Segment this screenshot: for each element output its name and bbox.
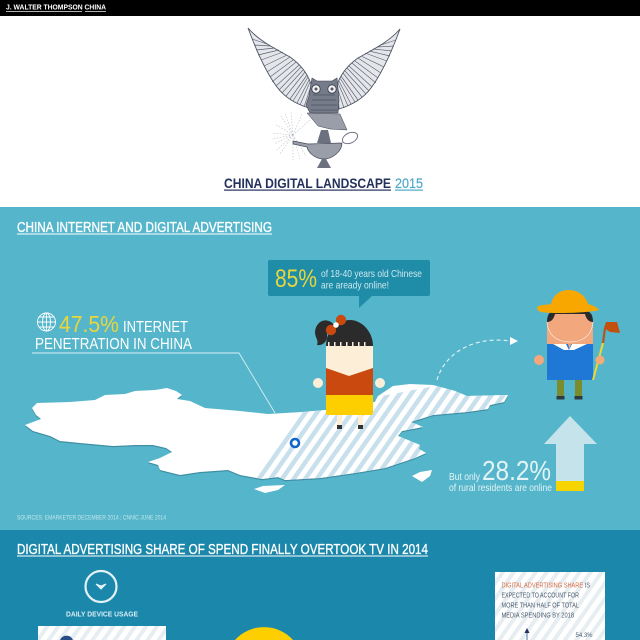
rural stat: 28.2% (482, 455, 551, 486)
panel: digital advertising share (0, 530, 640, 640)
card: digital share forecast: EXPECTED TO ACCOUNT FOR (502, 590, 579, 600)
top bar (0, 0, 640, 16)
card: digital share forecast: 54.3% (576, 632, 593, 639)
card: digital share forecast: MEDIA SPENDING BY 2018 (502, 610, 574, 619)
map of China (25, 384, 508, 493)
heading: digital advertising share of spend: DIGITAL ADVERTISING SHARE OF SPEND FINALLY OVERTOOK TV IN 2014 (17, 542, 428, 558)
callout: 85 percent: of 18-40 years old Chinese (321, 268, 422, 280)
sources: SOURCES: EMARKETER DECEMBER 2014 ; CNNIC JUNE 2014 (17, 514, 166, 522)
icon: clock (86, 571, 116, 602)
illustration: owl with lamp (248, 28, 400, 168)
island: Taiwan (412, 470, 432, 482)
penetration stat: PENETRATION IN CHINA (35, 336, 192, 353)
icon: farmer character (534, 290, 620, 400)
panel: China internet (0, 207, 640, 530)
lamp (341, 130, 359, 146)
island: Hainan (254, 485, 285, 493)
up arrow (544, 416, 597, 491)
map location marker (291, 439, 299, 447)
icon: globe (38, 313, 56, 331)
callout: 85 percent: are aready online! (321, 280, 389, 292)
device usage card (38, 626, 166, 640)
icon: girl character (313, 315, 385, 429)
leader line (32, 353, 275, 413)
rural stat: But only (449, 471, 481, 483)
title: CHINA DIGITAL LANDSCAPE (224, 175, 391, 191)
dashed arrow (437, 337, 518, 380)
penetration stat: INTERNET (123, 319, 188, 336)
owl body (306, 78, 339, 113)
label: daily device usage: DAILY DEVICE USAGE (66, 610, 138, 618)
left wing (248, 28, 311, 108)
penetration stat: 47.5% (59, 311, 119, 337)
top bar: J. WALTER THOMPSON CHINA (6, 4, 106, 12)
rural stat (449, 455, 552, 494)
card: digital share forecast: DIGITAL ADVERTISING SHARE IS (502, 580, 590, 589)
card: digital share forecast: MORE THAN HALF OF TOTAL (502, 600, 579, 609)
heading: China internet and digital advertising: CHINA INTERNET AND DIGITAL ADVERTISING (17, 220, 272, 236)
lamp sparks (272, 112, 310, 160)
card: digital share forecast (495, 572, 605, 640)
callout: 85 percent: 85% (275, 265, 317, 293)
title: 2015 (395, 175, 423, 191)
penetration stat (35, 311, 192, 353)
right wing (337, 29, 400, 109)
callout: 85 percent (268, 260, 430, 308)
header panel (0, 16, 640, 207)
rural stat: of rural residents are online (449, 482, 552, 494)
yellow circle (235, 627, 293, 640)
